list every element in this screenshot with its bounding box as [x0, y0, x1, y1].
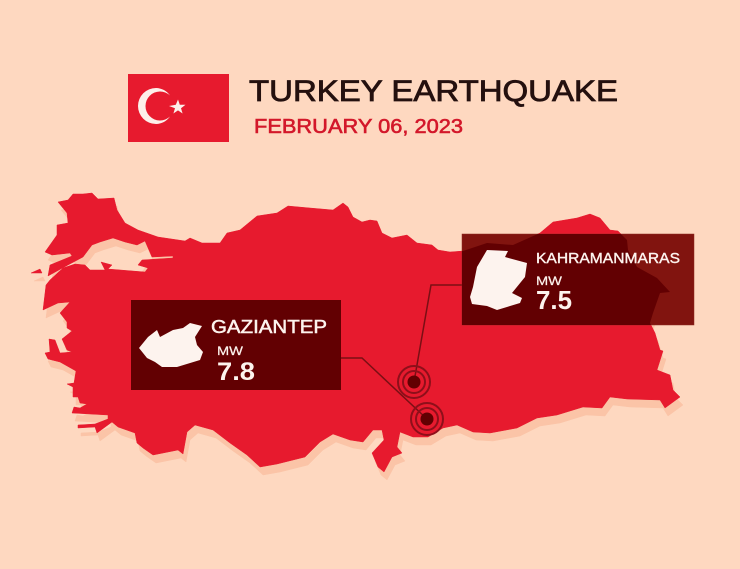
magnitude 7.8: 7.8 [217, 358, 255, 386]
icon: Kahramanmaras province shape [470, 250, 527, 310]
date subtitle: FEBRUARY 06, 2023 [254, 116, 463, 138]
panel: Gaziantep [131, 300, 341, 390]
epicenter marker: Kahramanmaras [398, 366, 430, 398]
label: MW: MW [217, 344, 244, 358]
label: Gaziantep: GAZIANTEP [211, 317, 327, 337]
epicenter marker: Gaziantep [411, 403, 443, 435]
panel: Kahramanmaras [462, 234, 694, 325]
label: Kahramanmaras: KAHRAMANMARAS [536, 250, 680, 267]
title: TURKEY EARTHQUAKE [249, 75, 618, 108]
label: MW: MW [536, 274, 563, 288]
map of Turkey [31, 193, 683, 480]
connector: Kahramanmaras to epicenter [414, 285, 462, 382]
connector: Gaziantep to epicenter [341, 358, 427, 419]
icon: Gaziantep province shape [139, 323, 203, 367]
infographic canvas [31, 74, 694, 480]
flag of Turkey [128, 74, 229, 142]
magnitude 7.5: 7.5 [536, 285, 572, 315]
